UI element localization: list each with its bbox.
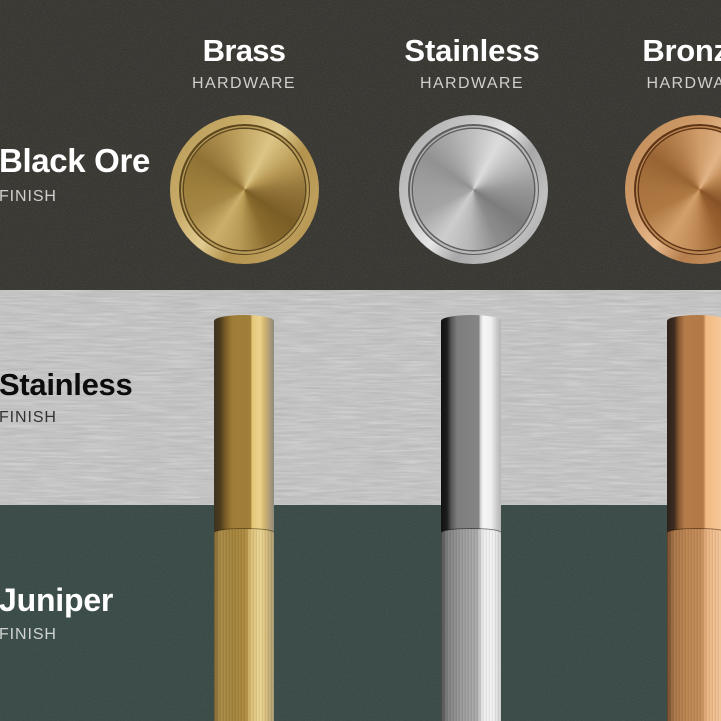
- brass ribbed section: [214, 529, 274, 721]
- label: stainless finish: FINISH: [0, 409, 57, 426]
- label: black ore finish: [0, 142, 150, 205]
- label: stainless finish: [0, 367, 132, 426]
- heading: stainless hardware: HARDWARE: [420, 75, 524, 92]
- heading: stainless hardware: Stainless: [404, 33, 540, 68]
- panel: stainless finish band: [0, 290, 721, 505]
- icon: bronze knob: [625, 115, 721, 264]
- stainless ribbed section: [441, 529, 501, 721]
- label: juniper finish: [0, 582, 113, 643]
- label: stainless finish: Stainless: [0, 367, 132, 402]
- icon: stainless knob: [399, 115, 548, 264]
- heading: stainless hardware: [404, 33, 540, 92]
- label: juniper finish: FINISH: [0, 626, 57, 643]
- icon: stainless handle: [441, 315, 501, 721]
- bronze ribbed section: [667, 529, 721, 721]
- label: black ore finish: Black Ore: [0, 142, 150, 179]
- panel: black ore finish band: [0, 0, 721, 290]
- heading: bronze hardware: [642, 33, 721, 92]
- heading: brass hardware: Brass: [203, 33, 285, 68]
- heading: brass hardware: HARDWARE: [192, 75, 296, 92]
- heading: brass hardware: [192, 33, 296, 92]
- icon: bronze handle: [667, 315, 721, 721]
- panel: juniper finish band: [0, 505, 721, 721]
- label: juniper finish: Juniper: [0, 582, 113, 618]
- label: black ore finish: FINISH: [0, 188, 57, 205]
- icon: brass handle: [214, 315, 274, 721]
- icon: brass knob: [170, 115, 319, 264]
